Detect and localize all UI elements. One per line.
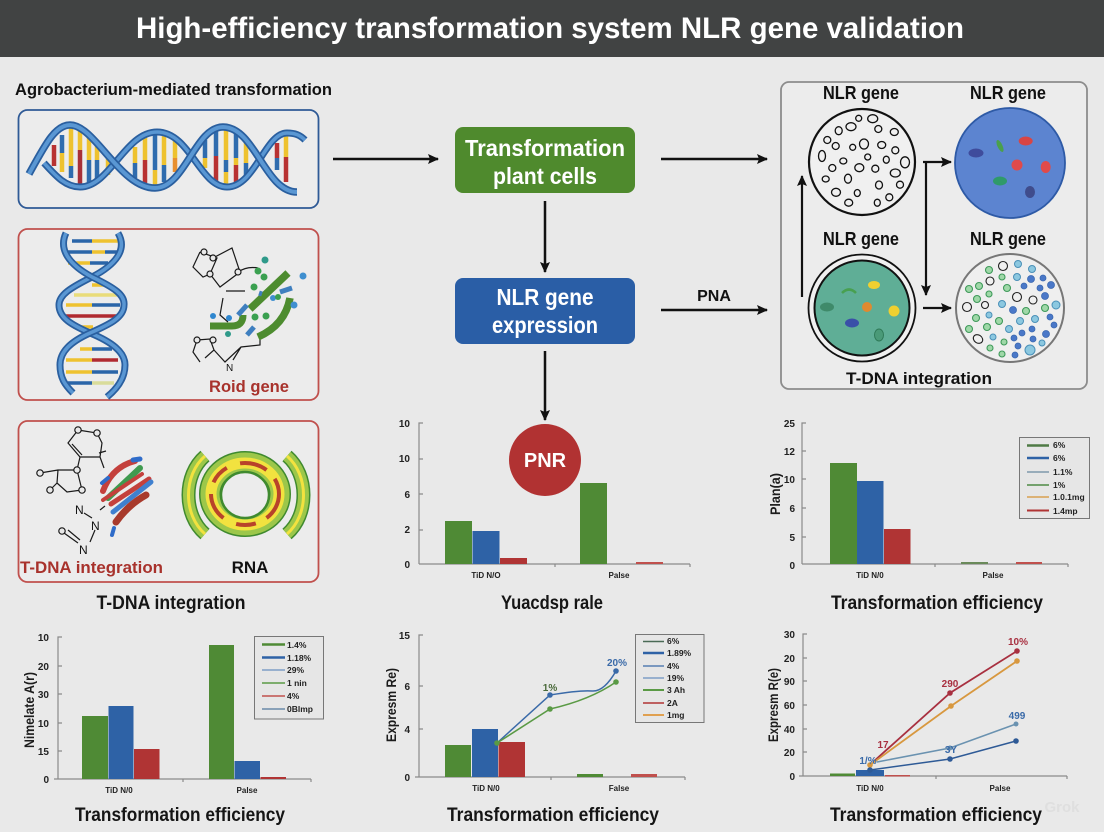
legend: 1.89% <box>667 648 692 658</box>
bar chart: Transformation efficiency top right: 10 <box>784 475 795 486</box>
icon: chemical structure: N <box>75 503 84 517</box>
bar chart: Transformation efficiency top right: Transformation efficiency <box>831 593 1043 614</box>
bar chart: Transformation efficiency bottom left <box>21 633 324 826</box>
icon: vertical DNA helix <box>59 233 125 397</box>
legend: 29% <box>287 665 304 675</box>
bar chart: Transformation efficiency bottom left: Palse <box>237 786 258 795</box>
box: NLR gene expression: NLR gene <box>496 284 594 310</box>
arrow: transformation to cells panel <box>661 158 767 160</box>
badge: PNR <box>509 424 581 496</box>
bar chart: Transformation efficiency top right: 25 <box>784 419 795 430</box>
caption: T-DNA integration: T-DNA integration <box>96 593 246 614</box>
arrow: transformation to expression <box>544 201 546 272</box>
legend: 4% <box>667 661 680 671</box>
combo chart: Transformation efficiency bottom centre: 15 <box>399 631 410 642</box>
bar chart: Transformation efficiency bottom left: 0 <box>43 775 49 786</box>
icon: chemical structure <box>37 427 106 557</box>
arrow: vertical between columns <box>925 163 927 295</box>
legend: 1.1% <box>1053 467 1073 477</box>
legend <box>1020 438 1090 518</box>
bar chart: Yuacdsp rale: 0 <box>404 560 410 571</box>
line chart: Transformation efficiency bottom right: 30 <box>784 630 795 641</box>
box: NLR gene expression <box>455 278 635 344</box>
cell: blue with coloured organelles <box>955 108 1065 218</box>
bar chart: Yuacdsp rale: 10 <box>399 454 410 465</box>
badge: PNR: PNR <box>524 450 567 472</box>
bar chart: Transformation efficiency bottom left: TiD N/0 <box>105 786 133 795</box>
arrow: green cell to spotted cell <box>923 307 951 309</box>
legend <box>636 634 704 722</box>
heading: Agrobacterium-mediated transformation: Agrobacterium-mediated transformation <box>15 80 332 99</box>
arrow: top-left cell to blue cell <box>923 161 951 163</box>
legend: 1 nin <box>287 678 307 688</box>
cell: white with outlined organelles <box>809 109 915 215</box>
legend: 1mg <box>667 710 684 720</box>
arrow label: PNA: PNA <box>697 288 731 305</box>
icon: molecule with protein strands <box>193 248 306 374</box>
box: Transformation plant cells: Transformation <box>465 135 625 161</box>
combo chart: Transformation efficiency bottom centre: False <box>609 784 630 793</box>
line chart: Transformation efficiency bottom right: TiD N/0 <box>856 784 884 793</box>
label: RNA: RNA <box>232 558 268 577</box>
bar chart: Transformation efficiency top right: Palse <box>983 571 1004 580</box>
line chart: Transformation efficiency bottom right: 40 <box>784 725 795 736</box>
icon: chemical structure: N <box>91 519 100 533</box>
bar chart: Yuacdsp rale: 6 <box>404 490 410 501</box>
line chart: Transformation efficiency bottom right: 290 <box>942 679 959 690</box>
line chart: Transformation efficiency bottom right: 20 <box>784 654 795 665</box>
bar chart: Yuacdsp rale <box>399 419 690 614</box>
combo chart: Transformation efficiency bottom centre: 4 <box>404 725 410 736</box>
legend: 1.0.1mg <box>1053 492 1085 502</box>
line chart: Transformation efficiency bottom right: 499 <box>1009 711 1026 722</box>
line chart: Transformation efficiency bottom right: Transformation efficiency <box>830 805 1042 826</box>
bar chart: Transformation efficiency bottom left: 30 <box>38 690 49 701</box>
bar chart: Transformation efficiency bottom left: 15 <box>38 747 49 758</box>
legend: 1% <box>1053 480 1066 490</box>
line chart: Transformation efficiency bottom right: 60 <box>784 701 795 712</box>
bar chart: Transformation efficiency top right: TiD N/0 <box>856 571 884 580</box>
bar chart: Transformation efficiency bottom left: Nimelate A(r) <box>21 672 37 748</box>
bar chart: Transformation efficiency bottom left: Transformation efficiency <box>75 805 285 826</box>
legend: 0Blmp <box>287 704 313 714</box>
line chart: Transformation efficiency bottom right: 3Y <box>945 745 957 756</box>
legend: 1.4mp <box>1053 506 1078 516</box>
bar chart: Transformation efficiency bottom left: 20 <box>38 662 49 673</box>
bar chart: Transformation efficiency top right: 6 <box>789 504 795 515</box>
legend <box>254 636 324 719</box>
label: NLR gene bottom right: NLR gene <box>970 229 1046 249</box>
watermark: Grok: Grok <box>1044 799 1080 816</box>
line chart: Transformation efficiency bottom right: 0 <box>789 772 795 783</box>
cell: green with double wall <box>808 254 916 362</box>
label: NLR gene top left: NLR gene <box>823 83 899 103</box>
icon: coloured strands <box>102 459 151 535</box>
bar chart: Transformation efficiency top right: Plan(a) <box>767 473 783 515</box>
box: Transformation plant cells <box>455 127 635 193</box>
legend: 2A <box>667 698 678 708</box>
arrow: expression to PNR <box>544 351 546 420</box>
legend: 19% <box>667 673 684 683</box>
bar chart: Transformation efficiency top right: 5 <box>789 533 795 544</box>
combo chart: Transformation efficiency bottom centre: 0 <box>404 773 410 784</box>
combo chart: Transformation efficiency bottom centre: 6 <box>404 682 410 693</box>
bar chart: Yuacdsp rale: 2 <box>404 525 410 536</box>
legend: 6% <box>667 636 680 646</box>
icon: chemical structure: N <box>79 543 88 557</box>
bar chart: Yuacdsp rale: 10 <box>399 419 410 430</box>
combo chart: Transformation efficiency bottom centre: TiD N/0 <box>472 784 500 793</box>
panel: DNA helix <box>18 110 318 208</box>
label: T-DNA integration (red): T-DNA integration <box>20 558 163 577</box>
cell: grey with many small organelles <box>956 254 1064 362</box>
bar chart: Yuacdsp rale: Palse <box>609 571 630 580</box>
combo chart: Transformation efficiency bottom centre: 1% <box>543 683 557 694</box>
line chart: Transformation efficiency bottom right: 10% <box>1008 637 1028 648</box>
bar chart: Yuacdsp rale: TiD N/O <box>471 571 501 580</box>
legend: 1.18% <box>287 653 312 663</box>
legend: 4% <box>287 691 300 701</box>
panel: NLR gene cells <box>781 82 1087 389</box>
bar chart: Transformation efficiency bottom left: 10 <box>38 719 49 730</box>
label: NLR gene top right: NLR gene <box>970 83 1046 103</box>
combo chart: Transformation efficiency bottom centre: Expresm Re) <box>383 668 399 742</box>
label: T-DNA integration: T-DNA integration <box>846 369 992 388</box>
label: Roid gene: Roid gene <box>209 377 289 396</box>
line chart: Transformation efficiency bottom right: 1/% <box>859 756 877 767</box>
line chart: Transformation efficiency bottom right: Palse <box>990 784 1011 793</box>
icon: molecule with protein strands: N <box>226 363 233 374</box>
title banner <box>0 0 1104 57</box>
box: Transformation plant cells: plant cells <box>493 163 597 189</box>
arrow: bottom-left cell up to top-left cell <box>801 176 803 297</box>
line chart: Transformation efficiency bottom right: 90 <box>784 677 795 688</box>
bar chart: Yuacdsp rale: Yuacdsp rale <box>501 593 603 614</box>
label: NLR gene bottom left: NLR gene <box>823 229 899 249</box>
line chart: Transformation efficiency bottom right <box>765 630 1067 826</box>
line chart: Transformation efficiency bottom right: Expresm R(e) <box>765 668 781 742</box>
combo chart: Transformation efficiency bottom centre <box>383 631 704 826</box>
panel: vertical DNA and Roid gene <box>18 229 318 400</box>
legend: 6% <box>1053 453 1066 463</box>
combo chart: Transformation efficiency bottom centre: Transformation efficiency <box>447 805 659 826</box>
combo chart: Transformation efficiency bottom centre: 20% <box>607 658 627 669</box>
arrow: expression to cells panel <box>661 309 767 311</box>
bar chart: Transformation efficiency bottom left: 10 <box>38 633 49 644</box>
panel: T-DNA integration and RNA <box>18 421 318 582</box>
bar chart: Transformation efficiency top right: 0 <box>789 561 795 572</box>
line chart: Transformation efficiency bottom right: 17 <box>877 740 889 751</box>
legend: 1.4% <box>287 640 307 650</box>
title banner: High-efficiency transformation system NLR gene validation <box>136 12 964 45</box>
legend: 3 Ah <box>667 685 685 695</box>
line chart: Transformation efficiency bottom right: 20 <box>784 748 795 759</box>
arrow: DNA to transformation <box>333 158 438 160</box>
bar chart: Transformation efficiency top right <box>767 419 1090 614</box>
icon: RNA ring <box>188 456 304 534</box>
legend: 6% <box>1053 440 1066 450</box>
box: NLR gene expression: expression <box>492 312 598 338</box>
bar chart: Transformation efficiency top right: 12 <box>784 447 795 458</box>
